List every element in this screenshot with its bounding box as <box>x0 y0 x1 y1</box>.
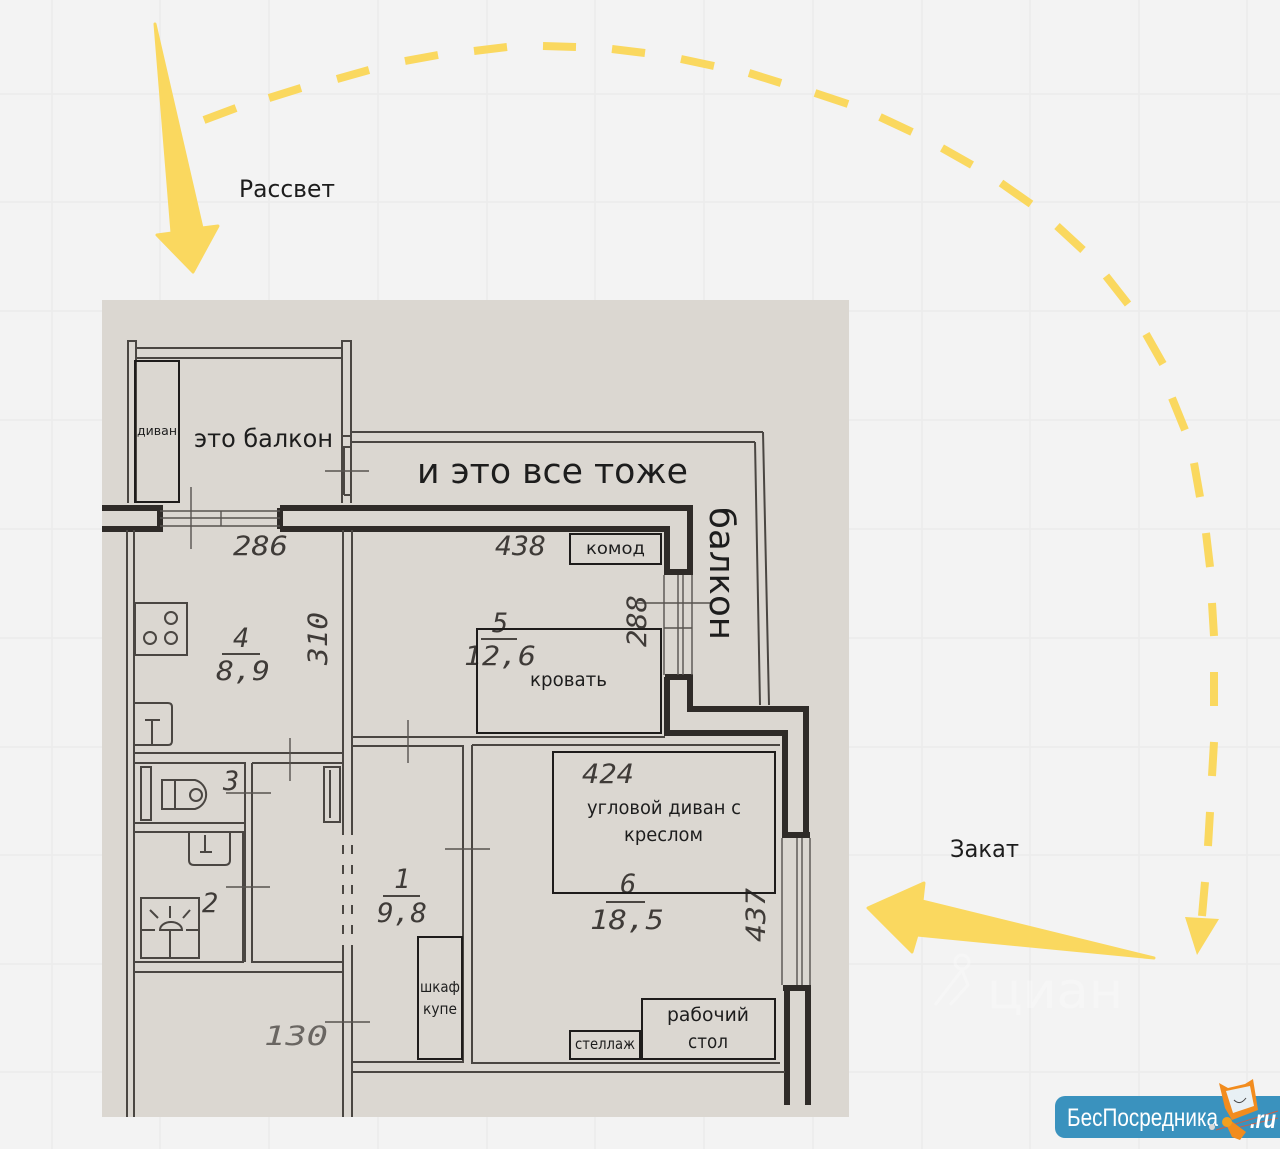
room numbers and dimensions <box>202 531 772 1052</box>
room numbers and dimensions: 286 <box>233 531 288 562</box>
bathroom sink icon <box>189 832 230 865</box>
room numbers and dimensions: 12,6 <box>464 641 536 672</box>
balcony walls <box>128 341 769 705</box>
furniture: wardrobe: купе <box>423 1000 457 1018</box>
label: sunrise: Рассвет <box>239 175 335 203</box>
room numbers and dimensions: 424 <box>582 759 634 790</box>
load-bearing walls <box>102 508 811 1105</box>
floor plan photo <box>102 300 849 1117</box>
label: balcony: это балкон <box>194 424 333 453</box>
furniture: corner sofa: угловой диван с <box>587 797 741 819</box>
room numbers and dimensions: 6 <box>620 869 636 900</box>
room numbers and dimensions: 3 <box>222 766 239 797</box>
arrow: sunrise <box>155 24 218 272</box>
room numbers and dimensions: 310 <box>303 612 334 666</box>
room numbers and dimensions: 4 <box>233 623 249 654</box>
furniture: bed <box>477 629 661 733</box>
furniture: desk <box>642 999 775 1059</box>
furniture: shelving <box>570 1031 640 1059</box>
furniture: sofa on balcony <box>135 361 179 502</box>
dashed sun path arrow <box>204 46 1219 955</box>
room numbers and dimensions: 130 <box>264 1021 328 1052</box>
logo: BezPosrednika: БесПосредника <box>1067 1104 1218 1132</box>
furniture: bed: кровать <box>530 669 607 691</box>
toilet icon <box>141 767 340 822</box>
room numbers and dimensions: 288 <box>622 595 653 647</box>
furniture: wardrobe <box>418 937 462 1059</box>
room numbers and dimensions: 9,8 <box>377 898 427 929</box>
room numbers and dimensions: 8,9 <box>216 656 270 687</box>
logo: BezPosrednika <box>1055 1079 1280 1140</box>
watermark: циан <box>987 962 1123 1020</box>
furniture: sofa on balcony: диван <box>137 424 177 438</box>
shower icon <box>141 898 199 958</box>
label: balcony vertical: балкон <box>701 507 741 640</box>
room numbers and dimensions: 5 <box>492 608 508 639</box>
furniture: desk: стол <box>688 1031 728 1053</box>
icon: cat mascot <box>1209 1079 1278 1140</box>
furniture: dresser: комод <box>586 539 645 559</box>
door marks <box>191 471 712 1022</box>
label: sunset: Закат <box>950 835 1019 863</box>
furniture: dresser <box>570 534 661 564</box>
kitchen sink icon <box>135 703 172 745</box>
room numbers and dimensions: 1 <box>394 864 410 895</box>
label: also balcony: и это все тоже <box>417 452 688 492</box>
furniture: shelving: стеллаж <box>575 1035 635 1053</box>
partition walls <box>127 530 785 1117</box>
room numbers and dimensions: 2 <box>202 888 218 919</box>
stove icon <box>135 603 187 655</box>
windows <box>160 511 810 985</box>
furniture: corner sofa <box>553 752 775 893</box>
watermark <box>935 955 1123 1020</box>
arrow: sunset <box>868 883 1154 958</box>
furniture: wardrobe: шкаф <box>420 978 460 996</box>
furniture: corner sofa: креслом <box>624 824 703 846</box>
furniture: desk: рабочий <box>667 1004 749 1026</box>
room numbers and dimensions: 437 <box>741 888 772 942</box>
room numbers and dimensions: 438 <box>495 531 546 562</box>
room numbers and dimensions: 18,5 <box>590 905 664 936</box>
